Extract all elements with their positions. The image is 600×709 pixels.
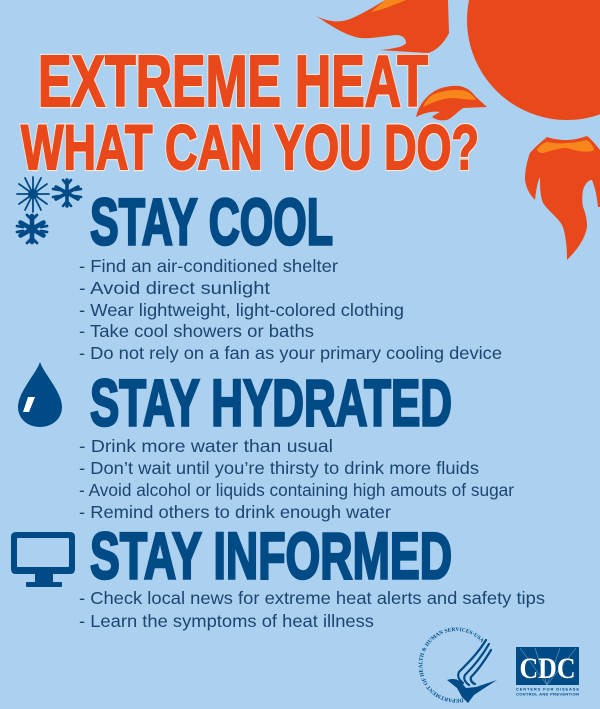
logo: CDC [516,647,579,696]
icon: snowflakes [17,177,81,243]
list: stay cool tips: - Wear lightweight, light-colored clothing [79,300,404,320]
list: stay informed tips: - Check local news for extreme heat alerts and safety tips [79,588,545,608]
list: stay hydrated tips: - Drink more water than usual [79,436,333,456]
list: stay informed tips [79,588,545,631]
list: stay informed tips: - Learn the symptoms of heat illness [79,611,374,631]
icon: computer monitor [11,532,75,587]
icon: water drop [18,362,62,427]
title [21,42,479,183]
list: stay hydrated tips: - Don’t wait until you’re thirsty to drink more fluids [79,458,479,478]
logo: CDC: CENTERS FOR DISEASE [516,686,579,692]
list: stay cool tips: - Find an air-conditioned shelter [79,256,338,276]
logo: HHS: DEPARTMENT OF HEALTH & HUMAN SERVICES·USA [418,627,484,703]
icon: sun with flames [316,0,600,260]
list: stay cool tips: - Take cool showers or baths [79,321,314,341]
list: stay hydrated tips: - Avoid alcohol or liquids containing high amouts of sugar [79,480,514,500]
list: stay hydrated tips: - Remind others to drink enough water [79,502,391,522]
list: stay cool tips [79,256,502,363]
title: EXTREME HEAT [38,42,428,122]
title: EXTREME HEAT [38,42,428,122]
list: stay cool tips: - Avoid direct sunlight [79,278,270,298]
heading: stay cool: STAY COOL [90,184,333,258]
logo: CDC: CONTROL AND PREVENTION [516,692,579,696]
logo: CDC: CDC [520,652,576,685]
list: stay hydrated tips [79,436,514,522]
list: stay cool tips: - Do not rely on a fan as your primary cooling device [79,343,502,363]
